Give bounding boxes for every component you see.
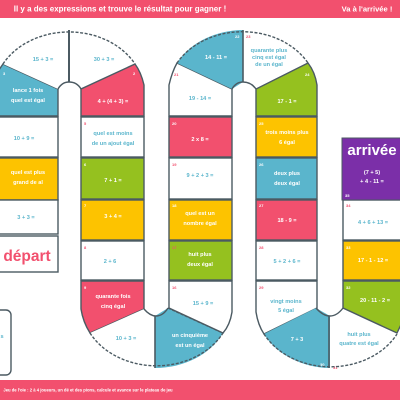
column D cells	[256, 117, 317, 334]
cell: 19 - 14	[169, 63, 232, 116]
bottom arch 2	[264, 308, 397, 370]
cell: 9 + 2: 9 + 2 + 3 =	[187, 173, 214, 179]
cell: 10 - 9	[0, 117, 58, 157]
cell: 15 - 9: 15 + 9 =	[193, 301, 214, 307]
cell: white text: de un égal	[255, 62, 283, 68]
cell: white text: de un ajout égal	[92, 141, 135, 147]
cell: 10 - 9: 10 + 9 =	[14, 136, 35, 142]
header band: Il y a des expressions et trouve le résultat pour gagner !	[14, 4, 226, 14]
cell: yellow text: grand de al	[13, 180, 43, 186]
cell: 15 + 3	[3, 30, 69, 89]
cell: pink wedge	[81, 281, 144, 333]
cell: 7 + 3	[264, 308, 330, 368]
cell: teal wedge: quel est égal	[11, 98, 45, 104]
cell: 14 - 11	[177, 30, 243, 89]
cell: yellow text: 6 égal	[279, 140, 295, 146]
cell: pink wedge: cinq égal	[101, 304, 126, 310]
cell: 2 x 8: 20	[172, 121, 177, 126]
cell: yellow text: quel est un	[185, 211, 215, 217]
cell: 3 + 3: 3 + 3 =	[17, 215, 35, 221]
cell: 18 - 9: 27	[259, 203, 264, 208]
cell: 19 - 14: 19 - 14 =	[189, 96, 212, 102]
column B cells	[81, 117, 144, 333]
cell: pink wedge: 4 + (4 + 3) =	[98, 99, 129, 105]
cell: 19 - 14: 21	[174, 72, 179, 77]
top arch 2	[177, 30, 317, 116]
cell: pink wedge: 2	[133, 71, 136, 76]
cell: white text	[243, 30, 308, 89]
cell: green wedge	[343, 281, 400, 333]
cell: 3 + 4: 7	[84, 203, 87, 208]
cell: white text: huit plus	[347, 332, 371, 338]
cell: white text	[330, 308, 397, 370]
cell: 15 + 3: 15 + 3 =	[33, 57, 54, 63]
cell: yellow text: 25	[259, 121, 264, 126]
cell: teal text: 26	[259, 162, 264, 167]
cell: 10 + 3: 10 + 3 =	[116, 336, 137, 342]
cell: 18 - 9: 18 - 9 =	[277, 218, 297, 224]
column A cells	[0, 64, 58, 272]
finish cell: + 4 - 11 =	[360, 179, 385, 185]
cell: 14 - 11: 22	[235, 34, 240, 39]
finish cell	[342, 138, 400, 200]
cell: 15 - 9	[169, 281, 232, 333]
cell: 30 + 3	[69, 30, 135, 89]
cell: white text: cinq est égal	[252, 55, 286, 61]
cell: 18 - 9	[256, 200, 317, 240]
cell: 17 - 1 - 12	[343, 241, 400, 280]
cell: green text	[169, 241, 232, 280]
cell: white text	[81, 117, 144, 157]
cell: green wedge: 17 - 1 =	[277, 99, 297, 105]
cell: white text	[256, 281, 317, 334]
cell: yellow text: nombre égal	[183, 221, 217, 227]
cell: 9 + 2: 19	[172, 162, 177, 167]
cell: yellow text	[169, 200, 232, 240]
cell: teal wedge: est un égal	[175, 343, 205, 349]
cell: 6 + 6: 34	[346, 203, 351, 208]
cell: green wedge: 20 - 11 - 2 =	[360, 298, 391, 304]
cell: 7 + 3: 7 + 3	[291, 337, 303, 343]
cell: white text: 5	[84, 121, 87, 126]
finish cell: (7 + 5)	[364, 170, 380, 176]
cell: 7 + 1: 7 + 1 =	[104, 178, 122, 184]
finish cell: arrivée	[347, 142, 397, 159]
cell: pink wedge: 9	[84, 285, 87, 290]
cell: 5 + 2 + 6: 5 + 2 + 6 =	[274, 259, 301, 265]
cell: green wedge: 32	[346, 285, 351, 290]
header band: Va à l'arrivée !	[342, 4, 392, 14]
cell: 7 + 3: 30	[320, 362, 325, 367]
cell: 15 - 9: 16	[172, 285, 177, 290]
cell: 2 + 6	[81, 241, 144, 280]
cell: 17 - 1 - 12: 33	[346, 245, 351, 250]
cell: white text: 23	[246, 34, 251, 39]
cell: 2 + 6: 2 + 6	[104, 259, 116, 265]
cell: green text: 17	[172, 245, 177, 250]
cell: 6 + 6	[343, 200, 400, 240]
cell: white text: 31	[333, 365, 338, 370]
cell: pink wedge: quarante fois	[95, 294, 131, 300]
cell: teal wedge: lance 1 fois	[13, 88, 43, 94]
header band	[0, 0, 400, 18]
cell: green wedge	[256, 63, 317, 116]
cell: 30 + 3: 30 + 3 =	[94, 57, 115, 63]
cell: teal wedge	[0, 64, 58, 116]
bottom arch 1	[90, 308, 223, 368]
column E cells	[342, 138, 400, 333]
cell: pink wedge	[81, 64, 144, 116]
cell: white text: quarante plus	[251, 48, 287, 54]
cell: 14 - 11: 14 - 11 =	[205, 55, 228, 61]
cell: white text: quatre est égal	[339, 341, 379, 347]
top arch 1	[3, 30, 144, 116]
cell: white text: 5 égal	[278, 308, 294, 314]
cell: 17 - 1 - 12: 17 - 1 - 12 =	[358, 258, 389, 264]
cell: 5 + 2 + 6: 28	[259, 245, 264, 250]
cell: 9 + 2	[169, 158, 232, 199]
cell: 2 x 8	[169, 117, 232, 157]
cell: 3 + 4	[81, 200, 144, 240]
rules panel	[0, 310, 11, 375]
cell: yellow text: 18	[172, 203, 177, 208]
cell: teal wedge	[155, 308, 223, 368]
cell: 3 + 4: 3 + 4 =	[104, 214, 122, 220]
cell: yellow text: trois moins plus	[265, 130, 309, 136]
cell: 5 + 2 + 6	[256, 241, 317, 280]
start cell	[0, 236, 58, 272]
cell: green text: deux égal	[187, 262, 213, 268]
cell: teal wedge: un cinquième	[172, 333, 208, 339]
cell: teal text: deux égal	[274, 181, 300, 187]
cell: yellow text	[256, 117, 317, 157]
cell: white text: quel est moins	[93, 131, 133, 137]
cell: 6 + 6: 4 + 6 + 13 =	[358, 220, 389, 226]
cell: teal text: deux plus	[274, 171, 300, 177]
cell: green text: huit plus	[188, 252, 212, 258]
footer band	[0, 380, 400, 400]
cell: 3 + 3	[0, 200, 58, 234]
cell: 7 + 1: 6	[84, 162, 87, 167]
cell: yellow text: quel est plus	[11, 170, 45, 176]
cell: teal text	[256, 158, 317, 199]
finish cell: 35	[345, 193, 350, 198]
footer band: Jeu de l'oie : 2 à 4 joueurs, un dé et des pions, calcule et avance sur le plateau de jeu	[3, 388, 173, 392]
rules panel: s	[0, 334, 4, 340]
cell: white text: vingt moins	[270, 299, 302, 305]
cell: 7 + 1	[81, 158, 144, 199]
cell: 2 + 6: 8	[84, 245, 87, 250]
column C cells	[169, 63, 232, 333]
cell: white text: 29	[259, 285, 264, 290]
cell: 2 x 8: 2 x 8 =	[191, 137, 209, 143]
cell: yellow text	[0, 158, 58, 200]
cell: green wedge: 24	[305, 72, 310, 77]
cell: teal wedge: 3	[3, 71, 6, 76]
start cell: départ	[3, 248, 51, 265]
